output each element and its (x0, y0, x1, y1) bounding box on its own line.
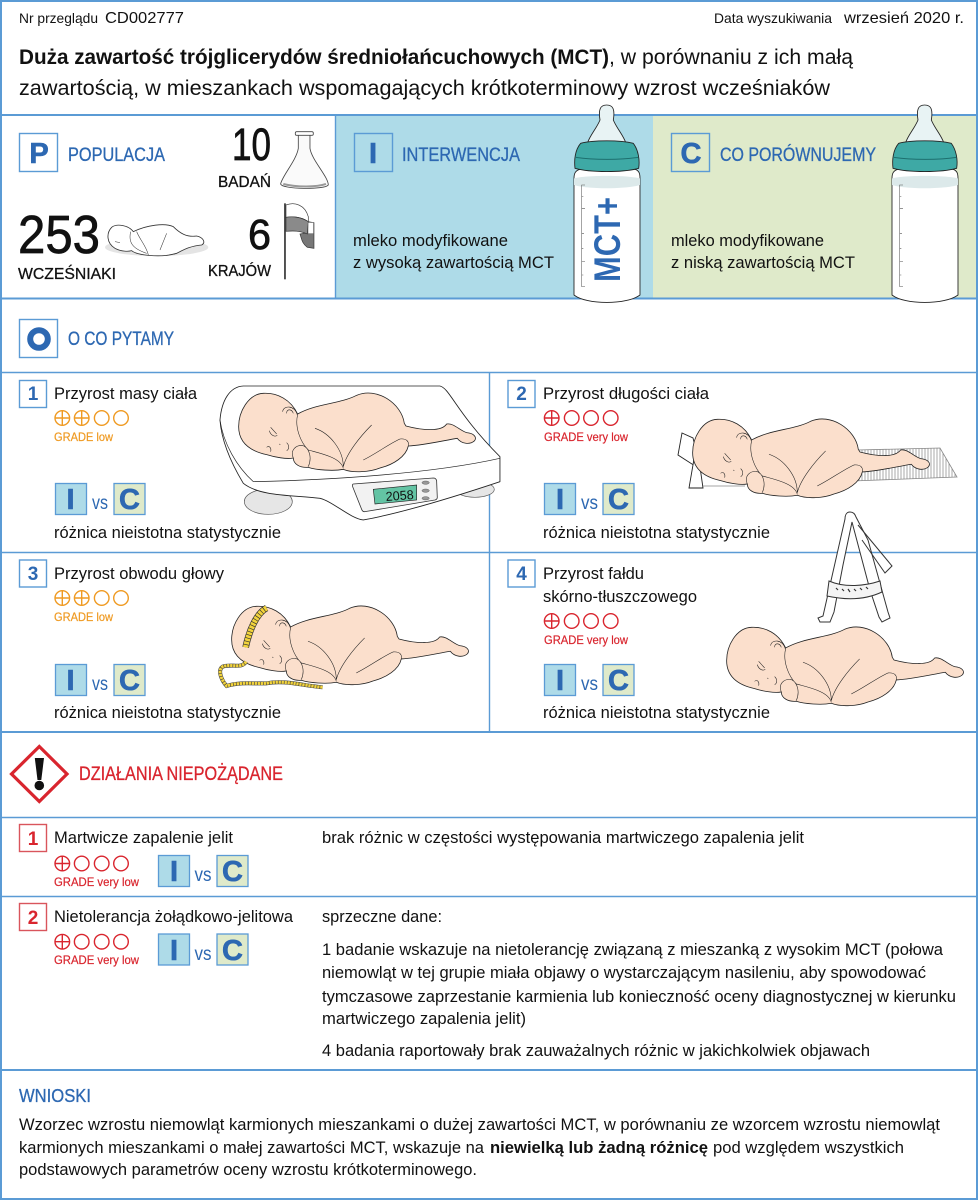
title: zawartością, w mieszankach wspomagających krótkoterminowy wzrost wcześniaków (19, 77, 831, 100)
number 3: 3 (28, 564, 38, 585)
icon: flag (285, 203, 314, 279)
panel: adverse effect 1 (20, 824, 804, 889)
GRADE rating: GRADE low (54, 430, 113, 444)
GRADE rating: GRADE very low (544, 430, 628, 444)
I vs C (56, 664, 145, 697)
intervention description: z wysoką zawartością MCT (353, 254, 554, 272)
illustration: infant on scale (220, 386, 500, 520)
panel: adverse effect 2 (20, 904, 956, 1060)
I vs C: I (66, 665, 75, 697)
conclusions text: podstawowych parametrów oceny wzrostu krótkoterminowego. (19, 1161, 477, 1179)
intervention heading: I (369, 138, 377, 170)
number 4 (508, 560, 535, 587)
outcome title: Przyrost masy ciała (54, 385, 198, 403)
conclusions text: Wzorzec wzrostu niemowląt karmionych mieszankami o dużej zawartości MCT, w porównaniu ze wzorcem wzrostu niemowląt (19, 1116, 940, 1134)
comparison heading (672, 134, 876, 172)
I vs C: vs (194, 944, 212, 965)
panel: comparison background (653, 116, 977, 298)
icon: bottle MCT+ (574, 105, 640, 302)
number 1 (20, 380, 46, 408)
stat: studies: BADAŃ (218, 172, 271, 191)
population heading: P (29, 138, 49, 170)
conclusions text: niewielką lub żadną różnicę (490, 1139, 708, 1157)
I vs C: I (556, 484, 564, 516)
panel: conclusions (19, 1086, 940, 1179)
adverse effect finding: brak różnic w częstości występowania martwiczego zapalenia jelit (322, 829, 804, 847)
adverse effect finding: niemowląt w tej grupie miała objawy o wystarczającym nasileniu, aby spowodować (322, 964, 926, 982)
GRADE rating: GRADE low (54, 610, 113, 624)
number 1: 1 (28, 829, 39, 850)
GRADE rating (544, 411, 628, 444)
I vs C: C (608, 484, 629, 516)
illustration: infant and skinfold caliper (727, 512, 963, 706)
number 1 (20, 824, 46, 852)
header: review number: CD002777 (105, 10, 184, 27)
icon: bottle MCT+: MCT+ (587, 197, 628, 282)
number 2 (20, 904, 46, 930)
GRADE rating (54, 934, 139, 967)
I vs C: vs (92, 493, 108, 514)
conclusions text: pod względem wszystkich (713, 1139, 904, 1157)
header: search date (714, 10, 964, 27)
I vs C (158, 856, 248, 888)
heading: outcomes question: O CO PYTAMY (68, 329, 174, 350)
illustration: infant on scale: 2058 (385, 487, 414, 504)
icon: swaddled infant (105, 225, 208, 256)
icon: warning diamond (12, 746, 67, 802)
panel: outcome 4 (508, 512, 963, 722)
icon: flask (281, 132, 328, 188)
comparison description (671, 232, 855, 272)
adverse effect finding: 1 badanie wskazuje na nietolerancję związaną z mieszanką z wysokim MCT (połowa (322, 941, 944, 959)
intervention description (353, 232, 554, 272)
GRADE rating: GRADE very low (54, 875, 139, 889)
GRADE rating (54, 591, 128, 624)
stat: studies (218, 119, 271, 191)
adverse effect finding: sprzeczne dane: (322, 908, 442, 926)
comparison heading: C (681, 138, 702, 170)
stat: countries: KRAJÓW (208, 261, 272, 280)
number 4: 4 (516, 564, 527, 585)
stat: countries (208, 211, 272, 280)
header: review number (19, 10, 184, 27)
conclusions heading: WNIOSKI (19, 1086, 91, 1106)
I vs C: C (119, 665, 140, 697)
outcome title: Przyrost fałdu (543, 565, 644, 583)
outcome title: Przyrost obwodu głowy (54, 565, 225, 583)
GRADE rating (54, 411, 128, 444)
header: search date: Data wyszukiwania (714, 10, 832, 26)
I vs C: I (170, 856, 178, 888)
number 2 (508, 380, 535, 408)
conclusions text (19, 1116, 940, 1179)
GRADE rating: GRADE very low (544, 633, 628, 647)
I vs C: C (119, 484, 140, 516)
panel: outcome 3 (20, 560, 468, 722)
heading: outcomes question (20, 320, 174, 358)
adverse effect finding: tymczasowe zaprzestanie karmienia lub konieczność oceny diagnostycznej w kierunku (322, 988, 956, 1006)
intervention heading: INTERWENCJA (402, 145, 520, 166)
GRADE rating: GRADE very low (54, 953, 139, 967)
number 1: 1 (28, 384, 39, 405)
stat: preterm infants: WCZEŚNIAKI (18, 264, 116, 283)
title: , w porównaniu z ich małą (609, 46, 853, 69)
stat: countries: 6 (248, 211, 271, 259)
I vs C: C (222, 935, 243, 967)
intervention heading (354, 134, 520, 172)
outcome title: skórno-tłuszczowego (543, 588, 697, 606)
title: Duża zawartość trójglicerydów średniołańcuchowych (MCT) (19, 46, 609, 69)
I vs C (544, 664, 634, 697)
stat: preterm infants: 253 (18, 205, 100, 265)
GRADE rating (54, 856, 139, 889)
population heading (20, 134, 165, 172)
adverse effect title: Nietolerancja żołądkowo-jelitowa (54, 908, 294, 926)
adverse effect finding (322, 908, 956, 1060)
I vs C: I (170, 935, 178, 967)
panel: population (18, 119, 328, 283)
stat: studies: 10 (232, 119, 271, 170)
number 2: 2 (516, 384, 527, 405)
title (19, 46, 853, 100)
illustration: infant with measuring tape (220, 606, 468, 687)
panel: outcome 2 (508, 380, 957, 542)
number 2: 2 (28, 908, 38, 929)
I vs C: vs (92, 674, 108, 695)
result: różnica nieistotna statystycznie (54, 524, 281, 542)
result: różnica nieistotna statystycznie (543, 524, 770, 542)
heading: adverse effects (12, 746, 283, 802)
intervention description: mleko modyfikowane (353, 232, 508, 250)
number 3 (20, 560, 46, 587)
header: review number: Nr przeglądu (19, 10, 98, 26)
I vs C: C (608, 665, 629, 697)
comparison heading: CO PORÓWNUJEMY (720, 144, 876, 166)
adverse effect finding: martwiczego zapalenia jelit) (322, 1010, 526, 1028)
adverse effect finding: 4 badania raportowały brak zauważalnych różnic w jakichkolwiek objawach (322, 1042, 870, 1060)
header: search date: wrzesień 2020 r. (843, 10, 964, 27)
I vs C: vs (581, 674, 598, 695)
illustration: infant on length board (678, 419, 957, 498)
I vs C (158, 934, 248, 967)
result: różnica nieistotna statystycznie (54, 704, 281, 722)
population heading: POPULACJA (68, 145, 165, 166)
panel: intervention (353, 105, 640, 302)
panel: comparison (671, 105, 958, 302)
I vs C: C (222, 856, 243, 888)
comparison description: mleko modyfikowane (671, 232, 824, 250)
conclusions text: karmionych mieszankami o małej zawartości MCT, wskazuje na (19, 1139, 485, 1157)
comparison description: z niską zawartością MCT (671, 254, 855, 272)
GRADE rating (544, 614, 628, 647)
result: różnica nieistotna statystycznie (543, 704, 770, 722)
outcome title: Przyrost długości ciała (543, 385, 710, 403)
I vs C: I (66, 484, 75, 516)
outcome title (543, 565, 697, 606)
panel: intervention background (336, 116, 653, 298)
icon: bottle (892, 105, 958, 302)
I vs C (544, 484, 634, 516)
I vs C: vs (581, 493, 598, 514)
adverse effect title: Martwicze zapalenie jelit (54, 829, 233, 847)
heading: adverse effects: DZIAŁANIA NIEPOŻĄDANE (79, 764, 283, 785)
I vs C (56, 484, 145, 516)
I vs C: vs (194, 865, 212, 886)
I vs C: I (556, 665, 564, 697)
panel: outcome 1 (20, 380, 281, 542)
